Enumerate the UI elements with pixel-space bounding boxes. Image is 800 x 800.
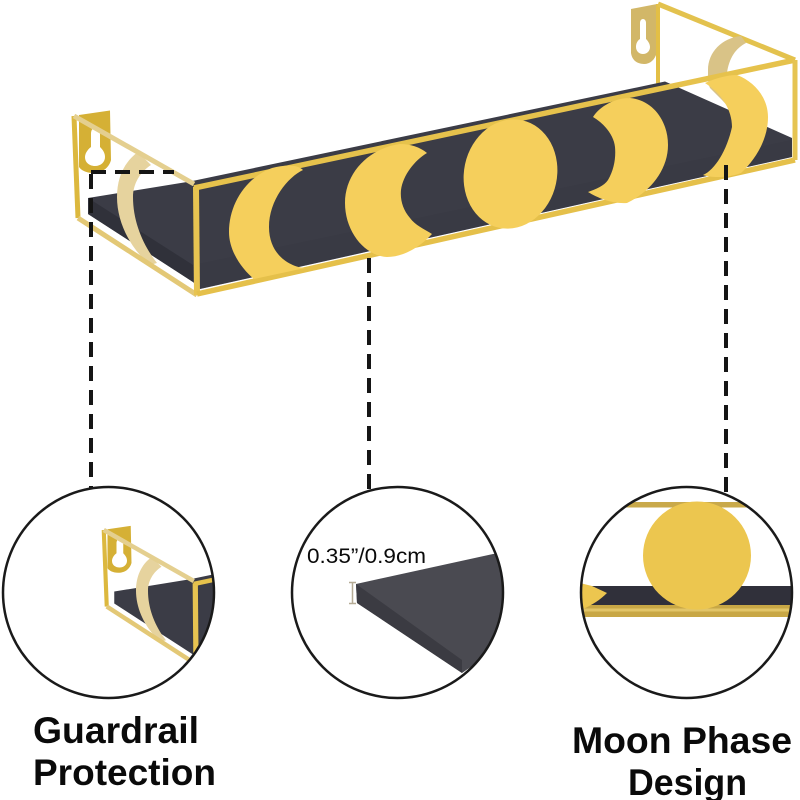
left inner crescent: [117, 152, 157, 265]
right rear crescent: [708, 36, 746, 112]
thickness label: 0.35”/0.9cm: [307, 544, 426, 568]
heading: moon phase design: Moon Phase: [572, 720, 792, 761]
panel: board thickness detail circle: [292, 487, 510, 698]
detail board slab: [356, 552, 510, 673]
detail bottom rail: [575, 605, 800, 617]
front frame rails: [194, 60, 795, 295]
icon: right wall bracket with keyhole: [631, 4, 657, 64]
icon: left wall bracket with keyhole: [79, 110, 111, 173]
detail dark board band: [591, 586, 791, 605]
moon: crescent 4: [588, 98, 668, 203]
shelf board: [88, 82, 792, 289]
heading: guardrail protection: Protection: [33, 752, 216, 793]
detail moon tip: [582, 584, 607, 609]
dashed connector: guardrail: [91, 172, 174, 488]
detail top rail: [620, 502, 750, 508]
heading: guardrail protection: Guardrail: [33, 710, 199, 751]
detail crescent: [136, 557, 166, 642]
dashed connector: board thickness: [367, 258, 371, 491]
left end frame rails: [74, 116, 197, 295]
heading: moon phase design: [572, 720, 792, 800]
icon: detail bracket: [108, 526, 132, 573]
dashed connector: moon phase: [724, 165, 728, 496]
panel: guardrail detail circle: [2, 486, 216, 700]
detail full moon: [643, 502, 751, 610]
moon: crescent 2: [345, 144, 432, 257]
moon: full moon: [454, 111, 567, 237]
moon: waxing crescent 1: [229, 166, 305, 279]
main shelf illustration: [74, 4, 795, 295]
detail rails: [102, 528, 212, 661]
thickness marker: [349, 582, 356, 604]
panel: moon phase detail circle: [575, 487, 800, 698]
moon: crescent 5: [703, 75, 768, 177]
detail board: [114, 574, 213, 654]
rear frame of the right end: [658, 4, 795, 84]
heading: guardrail protection: [33, 710, 216, 793]
